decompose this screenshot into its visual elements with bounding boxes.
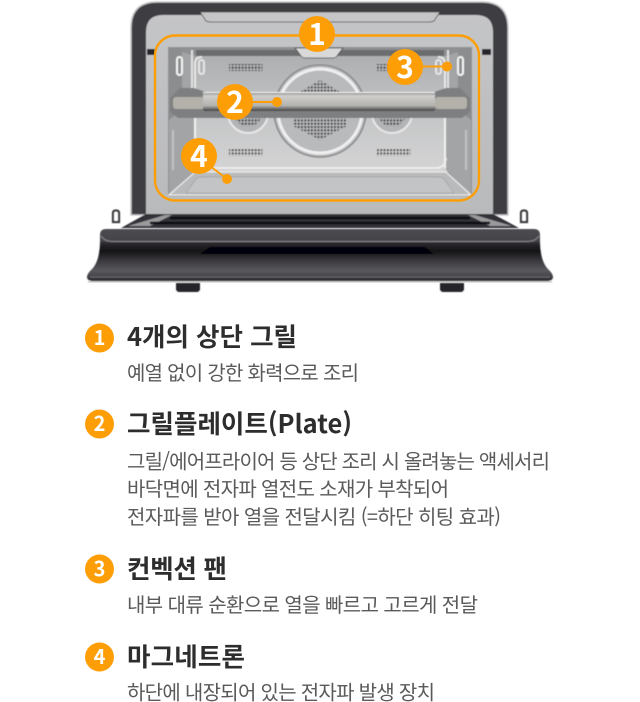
callout 1 [299,10,335,54]
item 1: top grill [85,317,359,386]
back wall corner lines [195,57,446,168]
open door [87,229,553,281]
badge 1 [85,322,114,352]
callout 4 [181,132,232,184]
callout 1: 1 [308,10,326,54]
oven cavity [168,47,472,196]
badge 1: 1 [94,322,105,351]
callout 2 [217,78,282,122]
description 3: 내부 대류 순환으로 열을 빠르고 고르게 전달 [127,589,478,618]
description 2 [127,446,550,530]
illustration: oven with open door [87,2,553,292]
description 1: 예열 없이 강한 화력으로 조리 [127,357,359,386]
door hinge left [113,210,119,222]
badge 2 [85,408,114,438]
heading 4: 마그네트론 [127,637,245,674]
badge 2: 2 [94,408,105,437]
description 2: 전자파를 받아 열을 전달시킴 (=하단 히팅 효과) [127,501,501,530]
door feet [176,283,464,292]
cavity side walls [169,48,195,195]
cavity floor [169,172,471,195]
door hinge right [521,210,527,222]
heading 3: 컨벡션 팬 [127,549,227,586]
badge 4: 4 [94,641,106,670]
oven body frame [131,2,508,215]
badge 3 [85,553,114,584]
heading 1: 4개의 상단 그릴 [127,317,297,354]
badge 3: 3 [94,553,105,582]
cavity top rim [196,50,444,56]
small side fans [228,93,412,133]
vent dot grids [229,64,410,156]
callout 3: 3 [396,43,414,87]
item 3: convection fan [85,549,478,618]
badge 4 [85,641,114,672]
grill plate tray [170,88,470,118]
callout 3 [387,43,452,87]
item 2: grill plate [85,404,550,530]
heading 2: 그릴플레이트(Plate) [127,404,352,441]
item 4: magnetron [85,637,435,702]
control strip [200,12,440,22]
callout 4: 4 [190,132,208,176]
central convection fan [274,65,366,157]
orange highlight frame [155,36,479,200]
door interior ledge [121,214,519,228]
oven inner front panel [146,15,493,214]
side latches [147,49,491,55]
side rack guides [173,50,466,170]
description 2: 바닥면에 전자파 열전도 소재가 부착되어 [127,473,449,502]
callout 2: 2 [226,78,244,122]
description 2: 그릴/에어프라이어 등 상단 조리 시 올려놓는 액세서리 [127,446,550,474]
